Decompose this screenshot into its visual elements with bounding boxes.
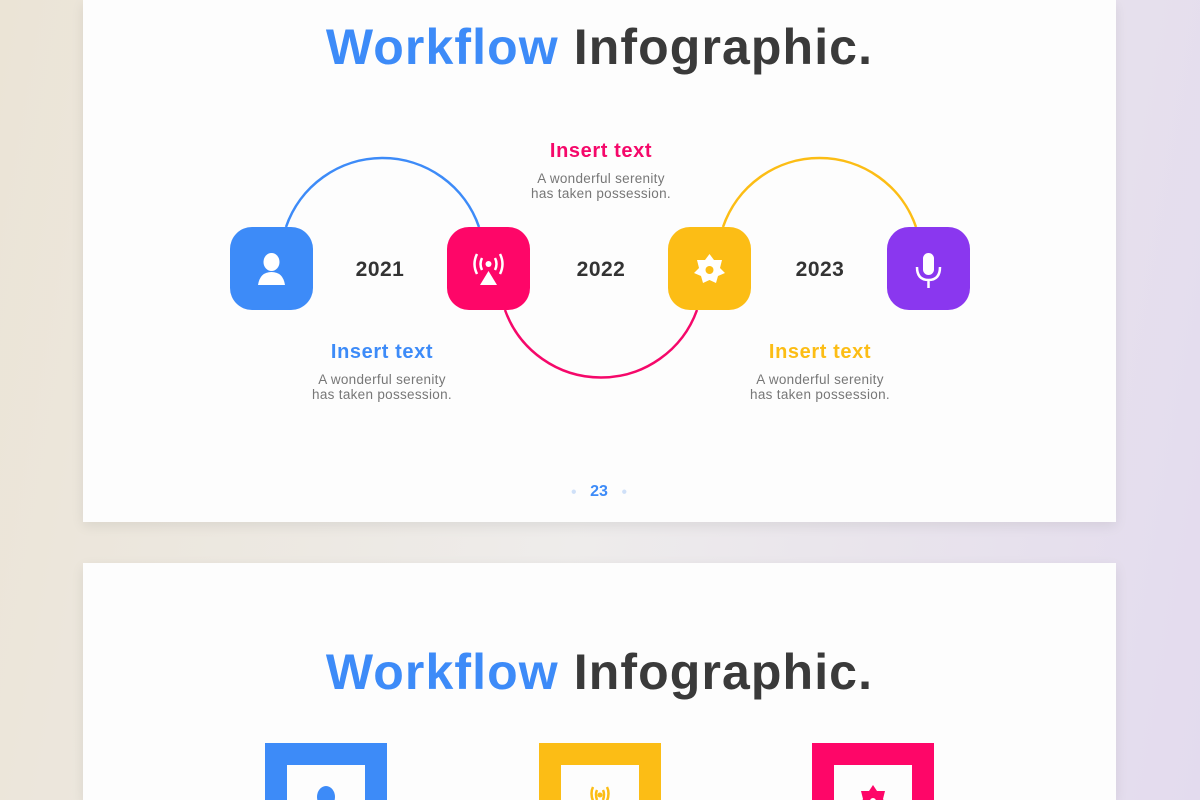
card: top slide: 2023 (796, 258, 844, 281)
icon: antenna (447, 227, 530, 310)
title: Workflow Infographic. (326, 644, 873, 700)
text block: blue (312, 341, 452, 402)
square: yellow (539, 743, 661, 800)
text block: top pink: has taken possession. (531, 186, 671, 201)
title: Workflow Infographic. (326, 19, 873, 75)
text block: blue: has taken possession. (312, 387, 452, 402)
square: pink (812, 743, 934, 800)
text block: yellow: Insert text (769, 341, 871, 363)
card: top slide: 2022 (577, 258, 625, 281)
text block: blue: A wonderful serenity (318, 372, 446, 387)
text block: top pink: A wonderful serenity (537, 171, 665, 186)
text block: yellow: A wonderful serenity (756, 372, 884, 387)
card: top slide (83, 0, 1116, 522)
arcs connecting icons (284, 156, 918, 379)
text block: blue: Insert text (331, 341, 433, 363)
year labels: 2021 (356, 258, 404, 281)
square: blue (265, 743, 387, 800)
page number: ● 23 ● (571, 483, 627, 500)
icon: person (230, 227, 313, 310)
text block: yellow: has taken possession. (750, 387, 890, 402)
text block: top pink (531, 140, 671, 201)
card: bottom slide (83, 563, 1116, 800)
text block: top pink: Insert text (550, 140, 652, 162)
icon: microphone (887, 227, 970, 310)
icon: gear (668, 227, 751, 310)
text block: yellow (750, 341, 890, 402)
